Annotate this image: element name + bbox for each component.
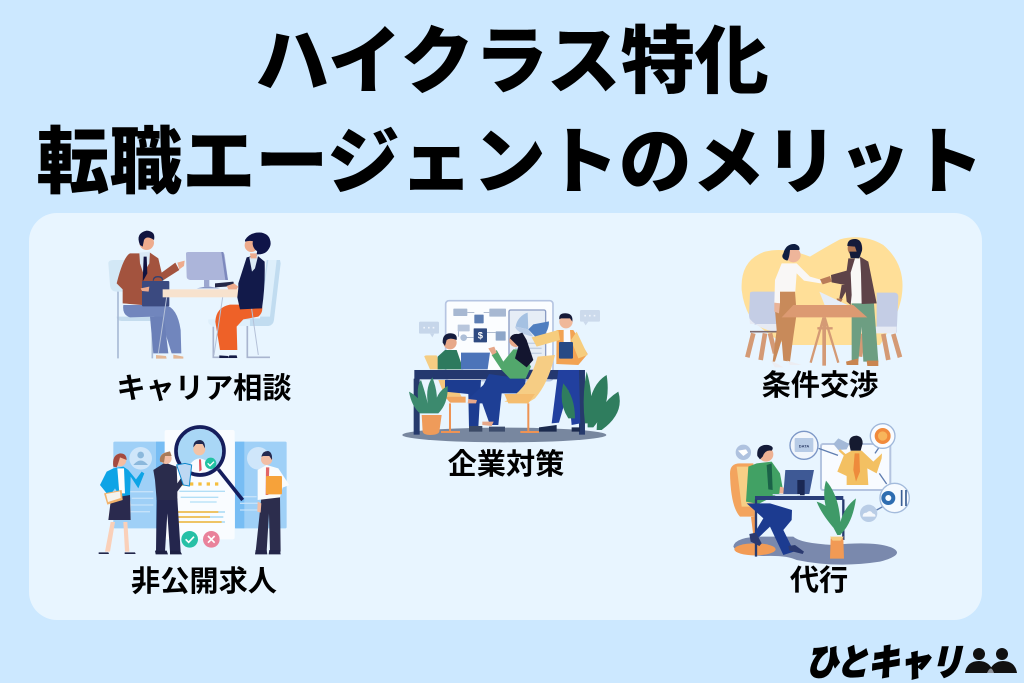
illustration: company preparation: [402, 301, 620, 442]
label: proxy services: 代行: [790, 564, 848, 597]
label: undisclosed jobs: 非公開求人: [131, 565, 277, 598]
panel: merits: [29, 213, 982, 620]
illustration: negotiation: [742, 237, 903, 367]
logo: hitokyari: ひとキャリ: [806, 642, 963, 683]
title: 転職エージェントのメリット: [36, 122, 984, 203]
icon: two people: [965, 648, 1017, 673]
title: [36, 20, 984, 203]
illustration: proxy services: DATA: [799, 443, 809, 448]
label: career consultation: キャリア相談: [116, 372, 292, 405]
illustration: undisclosed jobs: [99, 427, 289, 554]
label: company preparation: 企業対策: [448, 448, 564, 481]
illustration: proxy services: [730, 424, 909, 565]
illustration: company preparation: $: [478, 331, 484, 341]
label: negotiation: 条件交渉: [762, 369, 878, 402]
title: ハイクラス特化: [255, 20, 769, 103]
illustration: career consultation: [108, 231, 281, 359]
